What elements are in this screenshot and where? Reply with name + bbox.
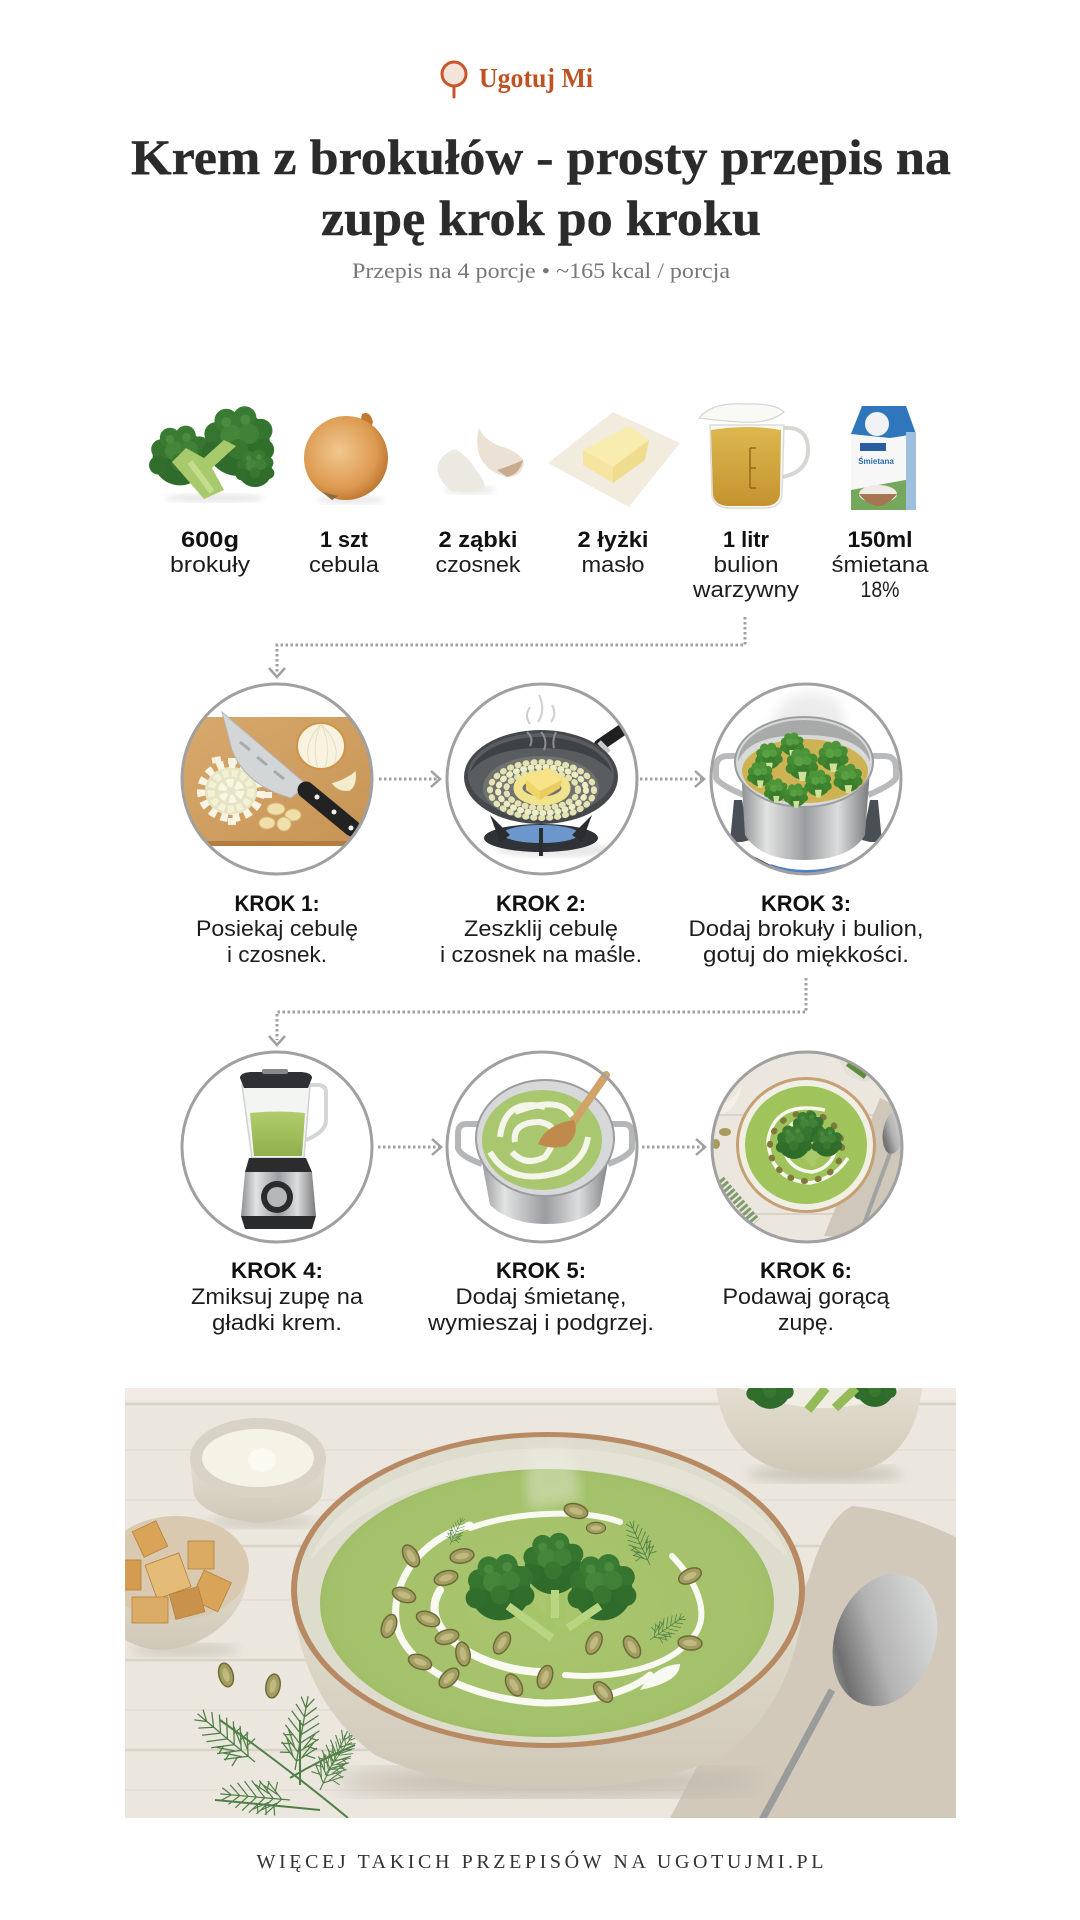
stove [730, 800, 882, 842]
illustration: pot with broccoli [716, 692, 896, 880]
illustration: cutting board [182, 712, 372, 846]
step 3 caption: Dodaj brokuły i bulion, [688, 916, 924, 941]
soup surface [320, 1469, 774, 1737]
dill garnish [443, 1515, 690, 1648]
logo wordmark: Ugotuj Mi [479, 63, 593, 93]
handles [716, 756, 744, 795]
arrow: step 3 to 4 [269, 978, 806, 1045]
step 2 caption [440, 891, 642, 967]
icon: ladle [442, 62, 466, 97]
step 5 caption: Dodaj śmietanę, [456, 1284, 626, 1309]
knife [222, 712, 354, 830]
icon: broth jug [699, 404, 808, 508]
broth [742, 739, 868, 803]
main bowl [291, 1432, 805, 1796]
ingredient labels: 2 ząbki [438, 527, 518, 552]
step 1 caption: KROK 1: [234, 891, 320, 916]
step 1 caption: Posiekaj cebulę [196, 916, 358, 941]
broccoli garnish [466, 1533, 636, 1642]
ingredient labels: śmietana [832, 552, 929, 577]
step 5 [427, 1052, 654, 1335]
ingredient labels [170, 527, 929, 602]
infographic canvas [125, 60, 956, 1872]
wooden spoon [572, 1075, 606, 1124]
arrow: step 2 to 3 [640, 771, 704, 787]
ingredient labels: cebula [309, 552, 380, 577]
ingredient labels: 1 litr [723, 527, 769, 552]
title [131, 129, 951, 246]
steam [772, 692, 845, 724]
spoon [759, 1574, 938, 1818]
step ring [447, 684, 637, 874]
logo [442, 62, 593, 97]
cream cup [190, 1418, 326, 1528]
icon: butter [548, 412, 680, 507]
title: zupę krok po kroku [321, 190, 761, 246]
napkin [669, 1506, 960, 1820]
arrow: step 4 to 5 [378, 1139, 441, 1155]
ingredient labels: 1 szt [320, 527, 369, 552]
step 6 caption: KROK 6: [760, 1258, 852, 1283]
florets [780, 732, 804, 757]
step 1 [182, 684, 372, 967]
step 1 caption [196, 891, 358, 967]
step 6 [710, 1050, 909, 1335]
ingredient labels: 2 łyżki [578, 527, 648, 552]
handle [600, 730, 622, 745]
step 4 caption [191, 1258, 364, 1335]
ingredient labels: warzywny [692, 577, 799, 602]
photo: finished soup [100, 1363, 960, 1820]
cooked onion [490, 762, 594, 818]
butter [526, 767, 560, 796]
step 5 caption: wymieszaj i podgrzej. [427, 1310, 654, 1335]
step ring [182, 684, 372, 874]
steam [520, 1469, 585, 1512]
step 5 caption [427, 1258, 654, 1335]
step 5 caption: KROK 5: [496, 1258, 586, 1283]
illustration: frying pan [464, 695, 622, 857]
pot body [741, 770, 870, 860]
icon: cream carton [851, 406, 916, 510]
onion half [297, 723, 345, 769]
step 4 caption: gładki krem. [212, 1310, 342, 1335]
icon: broccoli [149, 406, 274, 502]
table planks [125, 1388, 956, 1818]
crouton bowl [125, 1516, 249, 1658]
step 3 caption: KROK 3: [761, 891, 851, 916]
step 6 caption: Podawaj gorącą [722, 1284, 890, 1309]
ingredient labels: 150ml [848, 527, 912, 552]
burner [484, 824, 598, 852]
icon: garlic [438, 428, 524, 494]
ingredient labels: bulion [714, 552, 778, 577]
step 6 caption [722, 1258, 890, 1335]
loose seeds [216, 1662, 282, 1699]
step 3 caption [688, 891, 924, 967]
diced onion [201, 764, 261, 818]
arrow: step 5 to 6 [642, 1139, 705, 1155]
top right bowl [716, 1388, 922, 1484]
step 4 caption: KROK 4: [231, 1258, 323, 1283]
carton label: Śmietana [858, 457, 894, 466]
steam [527, 695, 554, 724]
step 3 caption: gotuj do miękkości. [703, 942, 909, 967]
panel: ingredients [149, 404, 929, 602]
step 4 caption: Zmiksuj zupę na [191, 1284, 364, 1309]
illustration: blender [240, 1069, 326, 1229]
step ring [182, 1052, 372, 1242]
ingredient labels: czosnek [436, 552, 522, 577]
subtitle: Przepis na 4 porcje • ~165 kcal / porcja [352, 258, 730, 283]
arrow: step 1 to 2 [379, 771, 440, 787]
cream swirl [396, 1514, 701, 1703]
illustration: pot with cream soup [458, 1075, 632, 1224]
dill sprig [194, 1696, 356, 1818]
step ring [711, 684, 901, 874]
step ring [447, 1052, 637, 1242]
step 3 [688, 684, 924, 967]
step 2 [440, 684, 642, 967]
step 2 caption: i czosnek na maśle. [440, 942, 642, 967]
title: Krem z brokułów - prosty przepis na [131, 129, 951, 185]
pumpkin seeds [378, 1501, 704, 1706]
arrow: ingredients to step 1 [269, 617, 745, 677]
ingredient labels: brokuły [170, 552, 250, 577]
step 4 [182, 1052, 372, 1335]
step ring [712, 1052, 902, 1242]
ingredient labels: masło [582, 552, 644, 577]
illustration: soup served from above [710, 1050, 909, 1245]
ingredient labels: 18% [860, 577, 900, 602]
step 2 caption: KROK 2: [496, 891, 586, 916]
step 2 caption: Zeszklij cebulę [464, 916, 618, 941]
step 1 caption: i czosnek. [227, 942, 327, 967]
garlic slices [259, 803, 301, 831]
step 6 caption: zupę. [778, 1310, 834, 1335]
icon: onion [304, 413, 388, 504]
ingredient labels: 600g [181, 527, 239, 552]
footer: WIĘCEJ TAKICH PRZEPISÓW NA UGOTUJMI.PL [256, 1849, 824, 1873]
